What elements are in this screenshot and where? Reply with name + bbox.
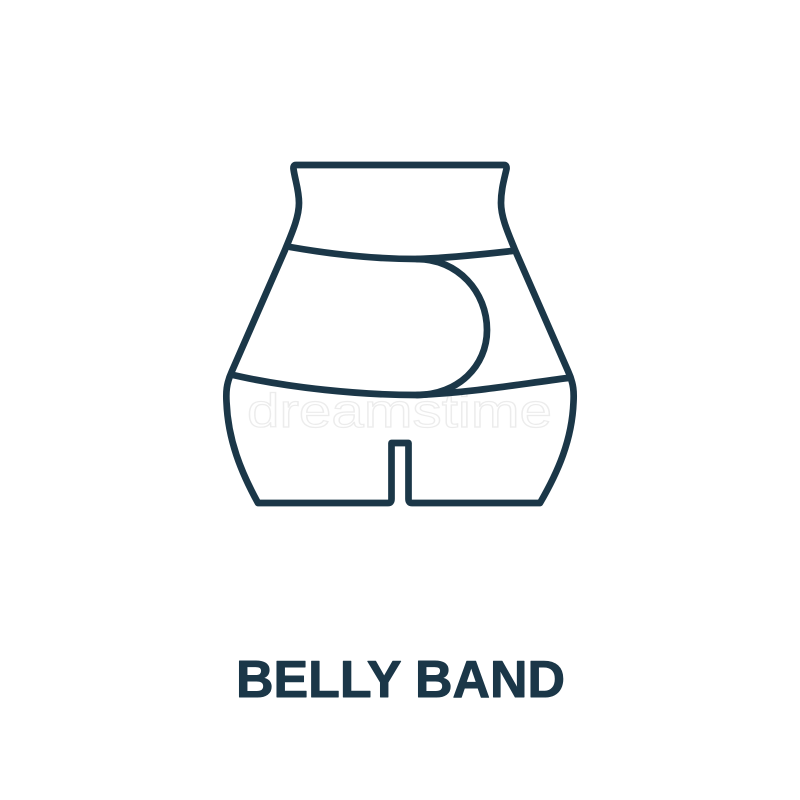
band lower edge xyxy=(233,375,568,395)
body outline xyxy=(226,165,574,503)
band top edge xyxy=(290,247,512,259)
icon: belly band on torso xyxy=(226,165,574,503)
band overlap flap xyxy=(417,259,487,395)
title: BELLY BAND xyxy=(236,651,565,709)
watermark: dreamstime xyxy=(247,384,552,437)
